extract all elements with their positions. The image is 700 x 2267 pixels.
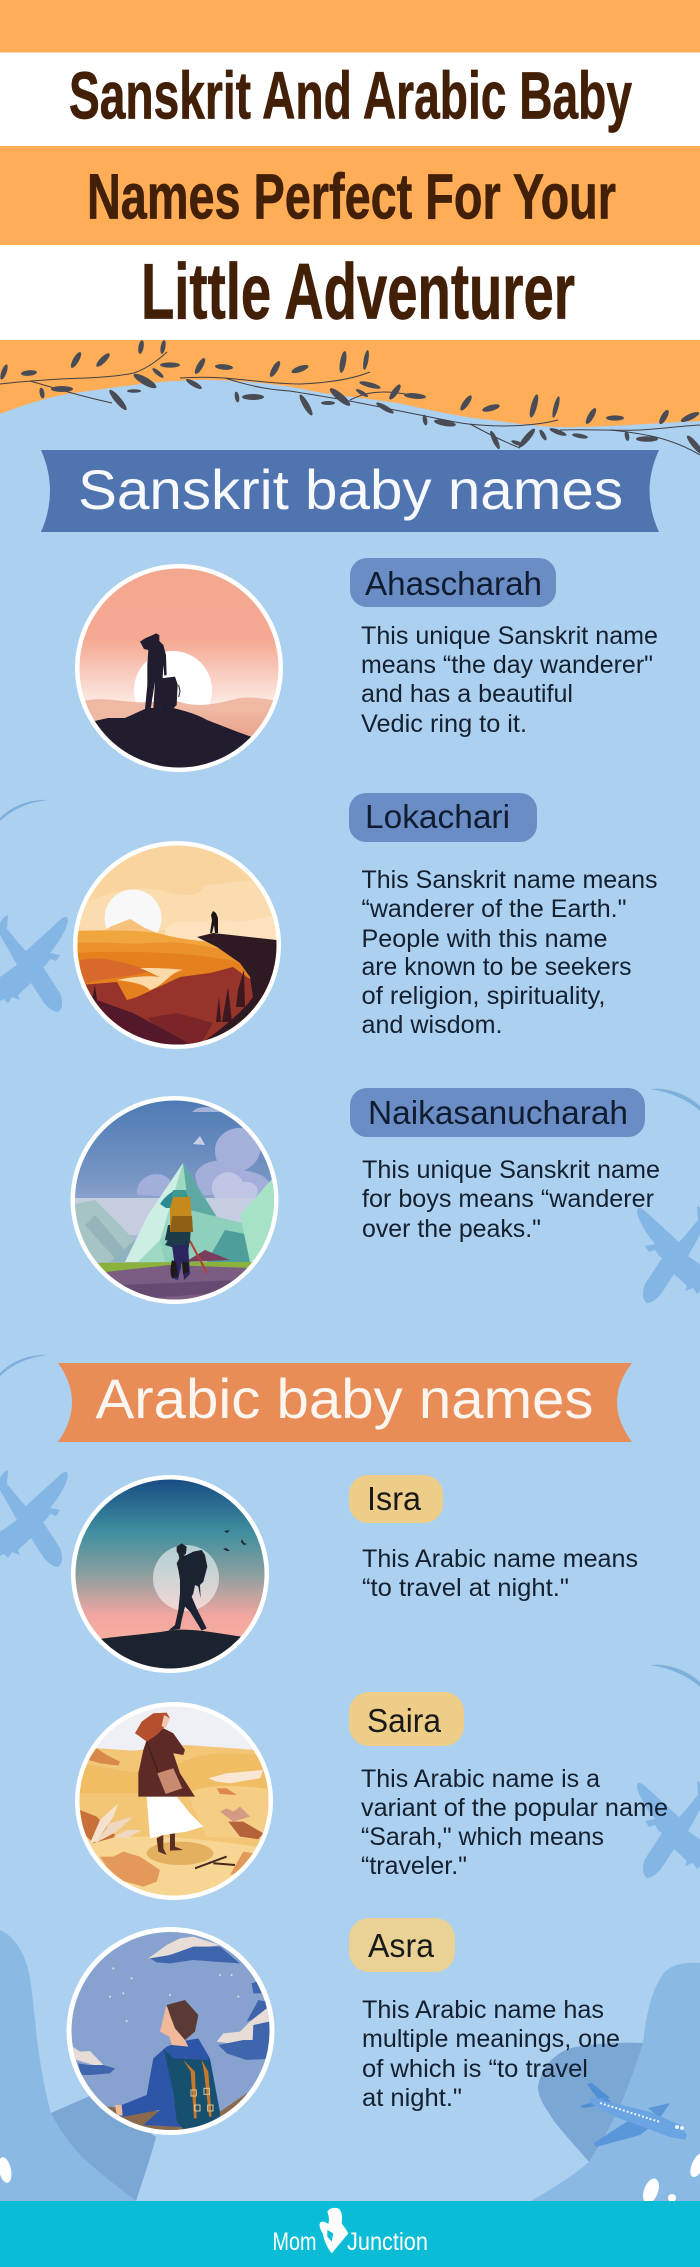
logo: MomJunction: Mom [272,2228,316,2256]
illustration: silhouette hiker with moon [71,1475,269,1675]
pill: Isra [349,1475,443,1523]
text: Asra description: multiple meanings, one [362,2025,620,2053]
text: Isra description: This Arabic name means [362,1545,638,1573]
logo: MomJunction [272,2208,428,2256]
background plane silhouette left upper [0,915,68,1012]
pill: Lokachari: Lokachari [365,798,510,835]
text: Naikasanucharah description: for boys means “wanderer [362,1185,654,1213]
pill: Ahascharah: Ahascharah [365,565,542,602]
text: Asra description: of which is “to travel [362,2055,588,2083]
text: Asra description: at night." [362,2084,462,2112]
background plane silhouette right upper [637,1206,700,1303]
text: Ahascharah description: and has a beautiful [361,680,573,708]
text: Lokachari description: “wanderer of the Earth." [362,895,626,923]
illustration: man on hill at sunset [75,564,285,775]
pill: Ahascharah [350,558,556,607]
footer bar [0,2201,700,2267]
text: Lokachari description: People with this name [362,925,608,953]
text: Lokachari description: are known to be seekers [362,953,632,981]
text: Naikasanucharah description: over the peaks." [362,1215,541,1243]
illustration: woman in windy desert [75,1702,277,1903]
pill: Lokachari [349,793,537,842]
background plane silhouette left lower [0,1470,68,1567]
logo: MomJunction: Junction [347,2228,428,2256]
background hill bottom right [531,1963,700,2206]
text: Saira description: This Arabic name is a [361,1765,600,1793]
banner: Sanskrit baby names [41,450,659,532]
pill: Isra: Isra [367,1480,422,1517]
pill: Naikasanucharah: Naikasanucharah [368,1094,628,1131]
pill: Naikasanucharah [350,1088,645,1137]
text: Isra description [362,1545,638,1602]
text: Saira description [361,1765,668,1880]
pill: Asra: Asra [368,1927,435,1964]
text: Asra description [362,1996,620,2112]
background hill bottom left [0,1930,156,2201]
background swoosh arcs [0,800,700,1687]
icon: blue airplane [580,2083,687,2147]
text: Isra description: “to travel at night." [362,1574,569,1602]
icon: mother and child heart [320,2208,348,2253]
text: Ahascharah description: means “the day wanderer" [361,651,653,679]
text: Saira description: variant of the popular name [361,1794,668,1822]
text: Asra description: This Arabic name has [362,1996,604,2024]
text: Lokachari description: of religion, spirituality, [362,982,606,1010]
text: Naikasanucharah description: This unique Sanskrit name [362,1156,660,1184]
text: Lokachari description: and wisdom. [362,1011,502,1039]
text: Ahascharah description [361,622,658,738]
pill: Asra [349,1918,455,1972]
illustration: backpacker facing green mountains [70,1096,285,1310]
banner: Arabic baby names [58,1363,632,1442]
pill: Saira: Saira [367,1702,442,1739]
background plane silhouette right lower [637,1781,700,1878]
text: Saira description: “traveler." [361,1852,467,1880]
text: Lokachari description: This Sanskrit name means [362,866,658,894]
text: Ahascharah description: This unique Sanskrit name [361,622,658,650]
title block [0,52,700,340]
text: Saira description: “Sarah," which means [361,1823,604,1851]
banner text: Arabic baby names [96,1367,594,1430]
text: Naikasanucharah description [362,1156,660,1243]
banner text: Sanskrit baby names [78,458,623,521]
text: Lokachari description [362,866,658,1039]
leafy branch decoration [0,340,700,456]
header orange wave [0,0,700,427]
illustration: hiker on cliff over orange valley [73,841,285,1050]
illustration: traveler looking at night sky [66,1927,277,2138]
pill: Saira [349,1692,464,1746]
text: Ahascharah description: Vedic ring to it. [361,710,527,738]
